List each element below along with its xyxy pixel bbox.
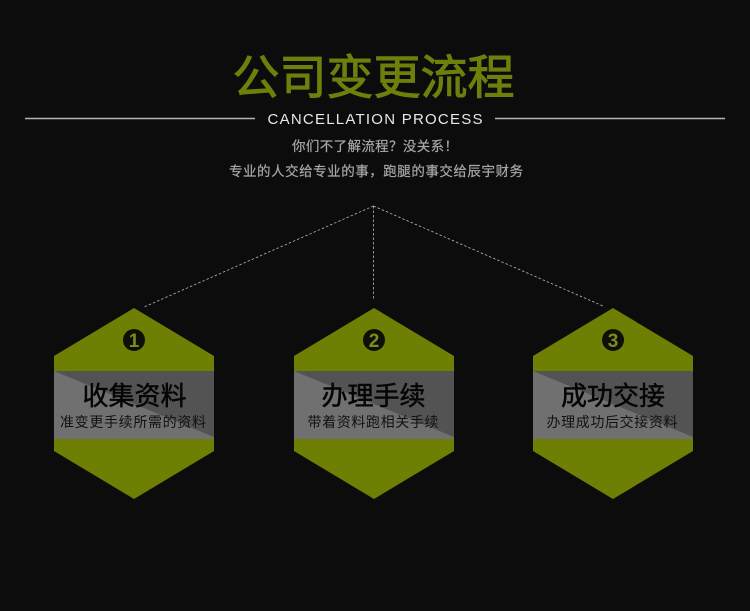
step description: 办理成功后交接资料 (546, 414, 678, 430)
step description: 带着资料跑相关手续 (308, 414, 438, 430)
band (54, 371, 214, 439)
step 2 hexagon (294, 308, 454, 499)
dashed connector lines (144, 206, 603, 307)
intro text: 专业的人交给专业的事，跑腿的事交给辰宇财务 (229, 163, 523, 179)
step heading: 成功交接 (561, 381, 665, 411)
step heading: 办理手续 (321, 381, 426, 411)
number badge: 1 (129, 331, 140, 352)
step heading: 收集资料 (82, 381, 187, 411)
band (533, 371, 693, 439)
intro text (229, 139, 523, 179)
step description: 准变更手续所需的资料 (60, 414, 206, 430)
number badge (123, 329, 145, 352)
step 1 hexagon (54, 308, 214, 499)
subtitle with rules: CANCELLATION PROCESS (268, 111, 482, 128)
band (294, 371, 454, 439)
number badge: 2 (369, 331, 379, 352)
number badge: 3 (608, 331, 618, 352)
intro text: 你们不了解流程？没关系！ (292, 139, 458, 154)
number badge (363, 329, 385, 352)
step 3 hexagon (533, 308, 693, 499)
title: 公司变更流程 (232, 51, 514, 104)
number badge (602, 329, 624, 352)
